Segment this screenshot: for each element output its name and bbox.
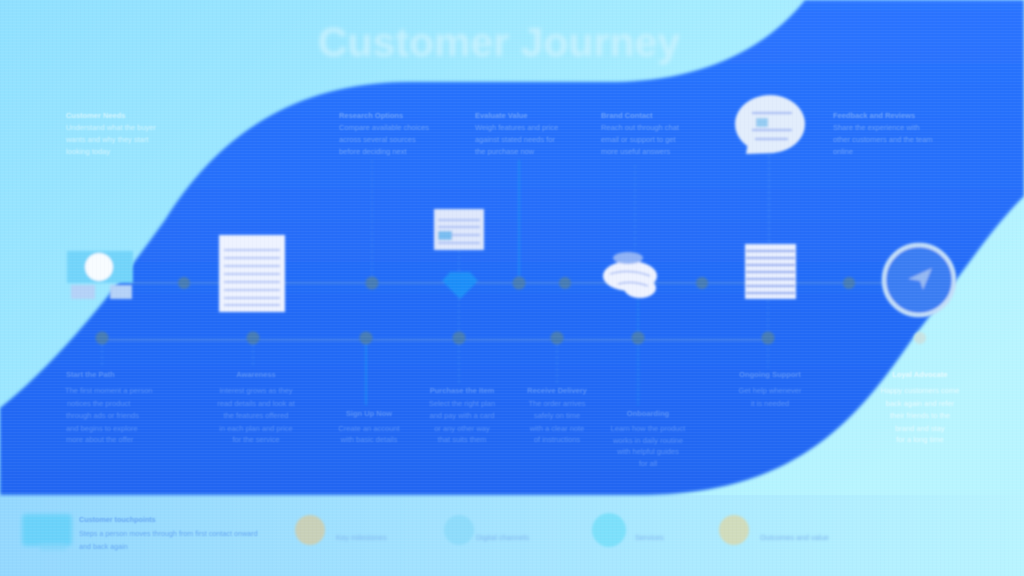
top text block 2: across several sources (339, 135, 416, 144)
bottom text block 8: their friends to the (890, 411, 950, 420)
bottom text block 1: The first moment a person (65, 386, 153, 395)
bottom text block 4: and pay with a card (429, 411, 495, 420)
bottom text block 1: Start the Path (66, 370, 115, 379)
bottom text block 4: or any other way (434, 424, 490, 433)
top text block 5: Share the experience with (833, 123, 920, 132)
top text block 2 (339, 111, 429, 156)
top text block 4: more useful answers (601, 147, 670, 156)
bottom text block 2: the features offered (224, 411, 288, 420)
bottom text block 2: Interest grows as they (219, 386, 293, 395)
bottom timeline (96, 298, 926, 405)
bottom text block 1: notices the product (67, 399, 131, 408)
bottom text block 2: Awareness (236, 370, 276, 379)
top text block 2: before deciding next (339, 147, 407, 156)
bottom text block 7 (739, 370, 802, 408)
top text block 2: Research Options (339, 111, 403, 120)
bottom text block 6: works in daily routine (612, 436, 683, 445)
bottom text block 4 (429, 386, 495, 444)
legend item: cyan circle one: Digital channels (476, 533, 529, 542)
bottom text block 2: in each plan and price (219, 424, 293, 433)
bottom text block 3: with basic details (340, 435, 398, 444)
top text block 4 (601, 111, 680, 156)
top text block 4: email or support to get (601, 135, 677, 144)
icon: compass ring (884, 245, 954, 315)
bottom text block 8: brand and stay (895, 424, 945, 433)
legend description text: Steps a person moves through from first contact onward (79, 529, 258, 538)
bottom text block 6 (611, 409, 686, 468)
legend item: cyan circle two (592, 513, 664, 547)
bottom text block 5: Receive Delivery (527, 386, 588, 395)
bottom text block 6: for all (639, 459, 658, 468)
bottom text block 7: Get help whenever (739, 386, 802, 395)
bottom legend band background (0, 495, 1024, 576)
bottom text block 1: more about the offer (66, 435, 134, 444)
bottom text block 8: back again and refer (886, 399, 955, 408)
top text block 4: Brand Contact (601, 111, 653, 120)
title: Customer Journey (318, 19, 680, 65)
legend item: key description (22, 514, 72, 550)
icon: brain cloud (603, 252, 657, 298)
legend description text: Customer touchpoints (79, 515, 156, 524)
top text block 5 (833, 111, 933, 156)
legend item: tan circle one: Key milestones (336, 533, 387, 542)
icon: monitor with profile (67, 251, 133, 299)
bottom text block 1: and begins to explore (66, 424, 138, 433)
icon: document (219, 235, 285, 312)
bottom text block 4: that suits them (438, 435, 486, 444)
top text block 5: online (833, 147, 853, 156)
icon: small card (434, 209, 484, 250)
top text block 3: Evaluate Value (475, 111, 528, 120)
icon: chat bubble (735, 95, 805, 154)
bottom text block 7: it is needed (751, 399, 789, 408)
legend item: tan circle two: Outcomes and value (760, 533, 829, 542)
top text block 4: Reach out through chat (601, 123, 680, 132)
top text block 2: Compare available choices (339, 123, 429, 132)
bottom text block 1: through ads or friends (66, 411, 139, 420)
bottom text block 6: Learn how the product (611, 424, 686, 433)
bottom text block 3: Sign Up Now (346, 409, 392, 418)
bottom text block 1 (65, 370, 153, 444)
top text block 1: Understand what the buyer (66, 123, 157, 132)
bottom text block 6: Onboarding (627, 409, 670, 418)
legend item: cyan circle two: Services (635, 533, 664, 542)
legend item: tan circle one (295, 515, 387, 545)
bottom text block 2: read details and look at (217, 399, 296, 408)
top text block 3: the purchase now (475, 147, 535, 156)
bottom text block 2: for the service (232, 435, 280, 444)
legend description text: and back again (79, 542, 128, 551)
top timeline (130, 155, 885, 338)
bottom text block 3: Create an account (338, 424, 401, 433)
top text block 1 (65, 111, 157, 156)
legend description text (79, 515, 258, 551)
top text block 3 (475, 111, 558, 156)
bottom text block 5: of instructions (534, 435, 580, 444)
bottom text block 8: for a long time (896, 435, 944, 444)
bottom text block 5: with a clear note (529, 424, 584, 433)
bottom text block 8: Loyal Advocate (892, 370, 948, 379)
icon: database document (745, 244, 796, 299)
bottom text block 7: Ongoing Support (739, 370, 801, 379)
bottom text block 4: Purchase the Item (430, 386, 495, 395)
top text block 3: Weigh features and price (475, 123, 558, 132)
bottom text block 5: safely on time (534, 411, 580, 420)
top text block 3: against stated needs for (475, 135, 556, 144)
top text block 1: looking today (66, 147, 110, 156)
top text block 1: Customer Needs (66, 111, 126, 120)
bottom text block 4: Select the right plan (429, 399, 495, 408)
legend item: tan circle two (719, 515, 829, 545)
bottom text block 5: The order arrives (528, 399, 586, 408)
top text block 5: Feedback and Reviews (833, 111, 915, 120)
bottom text block 2 (217, 370, 296, 444)
bottom text block 3 (338, 409, 401, 444)
bottom text block 8: Happy customers come (881, 386, 959, 395)
bottom text block 8 (881, 370, 959, 444)
top text block 5: other customers and the team (833, 135, 933, 144)
bottom text block 5 (527, 386, 588, 444)
bottom text block 6: with helpful guides (616, 447, 679, 456)
top text block 1: wants and why they start (65, 135, 149, 144)
legend item: cyan circle one (444, 515, 529, 545)
